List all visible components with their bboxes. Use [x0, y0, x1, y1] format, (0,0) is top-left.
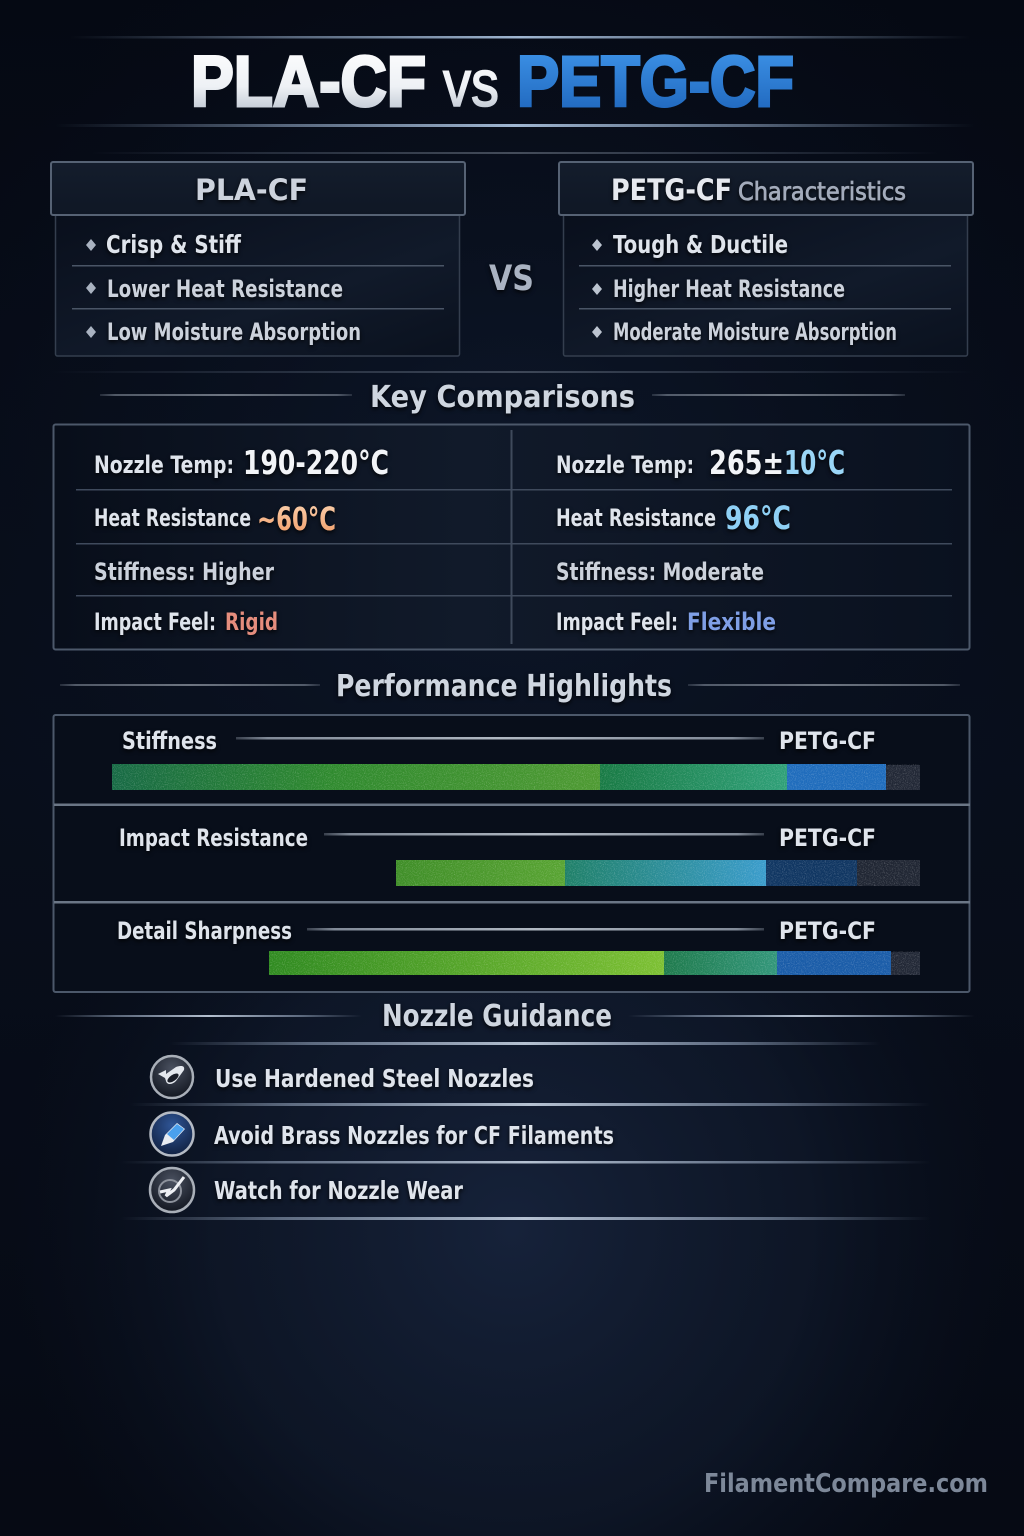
- row: nozzle temp: Nozzle Temp:: [556, 451, 694, 479]
- heading: PETG-CF characteristics: PETG-CF: [611, 173, 732, 207]
- row: nozzle temp: Nozzle Temp:: [94, 451, 234, 479]
- icon: hardened nozzle: [151, 1056, 193, 1098]
- row: heat resistance: [94, 499, 791, 538]
- row: impact feel: Rigid: [225, 608, 278, 636]
- chart row: detail sharpness: Detail Sharpness: [117, 917, 292, 945]
- chart row: impact resistance: [119, 824, 920, 886]
- row: nozzle temp: [94, 443, 845, 482]
- title: vs: [443, 46, 499, 120]
- text: avoid brass: Avoid Brass Nozzles for CF Filaments: [214, 1121, 614, 1150]
- title: PLA-CF: [191, 43, 426, 122]
- icon: blue pencil: [150, 1112, 194, 1156]
- row: nozzle temp: 10°C: [784, 443, 845, 482]
- row: nozzle temp: 190-220°C: [243, 443, 389, 482]
- row: heat resistance: Heat Resistance: [556, 504, 716, 532]
- panel: PLA-CF characteristics: [51, 162, 465, 356]
- footer: website: FilamentCompare.com: [704, 1469, 988, 1499]
- list: PLA-CF traits: Lower Heat Resistance: [107, 275, 343, 303]
- row: stiffness: Stiffness: Higher: [94, 558, 274, 586]
- chart row: stiffness: PETG-CF: [779, 727, 876, 755]
- list: PETG-CF traits: [592, 230, 897, 346]
- heading: Nozzle Guidance: Nozzle Guidance: [382, 999, 612, 1034]
- title: [55, 36, 975, 154]
- row: stiffness: [94, 558, 764, 586]
- heading: PETG-CF characteristics: Characteristics: [738, 177, 906, 206]
- list: PETG-CF traits: Tough & Ductile: [613, 230, 788, 259]
- row: impact feel: Impact Feel:: [556, 608, 678, 636]
- row: impact feel: Impact Feel:: [94, 608, 216, 636]
- panel: performance bars: [54, 715, 970, 992]
- chart row: stiffness: Stiffness: [122, 727, 217, 755]
- text: nozzle wear: Watch for Nozzle Wear: [214, 1176, 464, 1205]
- row: stiffness: Stiffness: Moderate: [556, 558, 764, 586]
- chart row: impact resistance: Impact Resistance: [119, 824, 308, 852]
- icon: wear check: [150, 1168, 194, 1212]
- panel: key comparisons table: [54, 424, 970, 650]
- list: PETG-CF traits: Moderate Moisture Absorption: [613, 318, 897, 346]
- heading: Key Comparisons: Key Comparisons: [370, 380, 635, 415]
- heading: PETG-CF characteristics: [611, 173, 906, 207]
- chart row: detail sharpness: [117, 917, 920, 975]
- chart row: stiffness: [112, 727, 920, 790]
- row: impact feel: Flexible: [687, 608, 776, 636]
- heading: Nozzle Guidance: [55, 999, 975, 1045]
- list: PLA-CF traits: Low Moisture Absorption: [107, 318, 361, 346]
- row: impact feel: [94, 608, 776, 636]
- list: PLA-CF traits: Crisp & Stiff: [106, 230, 242, 259]
- chart row: detail sharpness: PETG-CF: [779, 917, 876, 945]
- chart row: impact resistance: PETG-CF: [779, 824, 876, 852]
- vs badge: VS: [489, 259, 534, 299]
- text: hardened nozzles: Use Hardened Steel Nozzles: [215, 1064, 534, 1093]
- list: PETG-CF traits: Higher Heat Resistance: [613, 275, 845, 303]
- row: heat resistance: ~60°C: [257, 500, 336, 538]
- heading: Performance Highlights: Performance Highlights: [336, 669, 672, 704]
- heading: PLA-CF: PLA-CF: [195, 173, 308, 207]
- row: heat resistance: 96°C: [725, 499, 791, 537]
- row: heat resistance: Heat Resistance: [94, 504, 251, 532]
- row: nozzle temp: 265±: [709, 443, 784, 482]
- panel: PETG-CF characteristics: [559, 162, 973, 356]
- title: PETG-CF: [517, 43, 794, 122]
- list: PLA-CF traits: [86, 230, 361, 346]
- panel: nozzle guidance list: [120, 1056, 930, 1220]
